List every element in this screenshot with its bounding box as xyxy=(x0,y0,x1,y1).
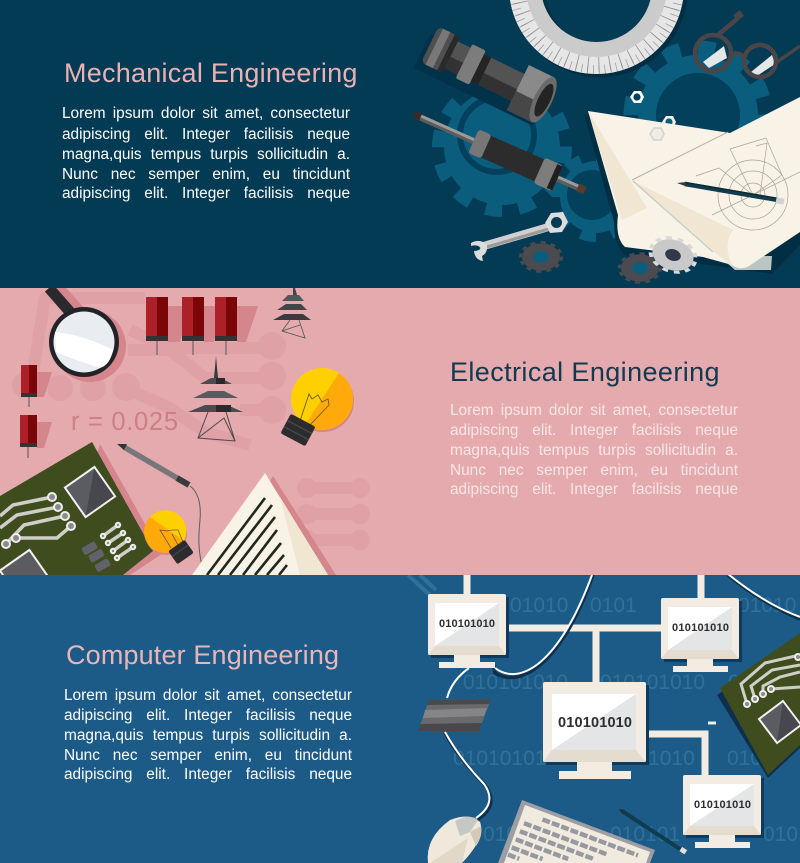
icon: monitor bottom right xyxy=(683,775,764,848)
monitor screen digits: 010101010 xyxy=(439,618,495,630)
icon: glasses xyxy=(695,13,800,77)
heading: Computer Engineering: Computer Engineering xyxy=(66,640,339,670)
icon: large gear left xyxy=(439,84,565,210)
icon: small gear middle xyxy=(556,157,636,237)
background binary digits: 0101 xyxy=(590,594,637,617)
circuit traces in background xyxy=(30,298,358,540)
monitor screen digits: 010101010 xyxy=(672,622,729,634)
icon: small transmission tower xyxy=(273,288,311,338)
icon: protractor xyxy=(514,0,680,70)
background binary digits: 01010 xyxy=(510,594,568,617)
icon: large light bulb xyxy=(280,368,354,446)
text block: computer description: adipiscing elit. Integer facilisis neque xyxy=(64,766,352,783)
decorative corner stripe xyxy=(408,575,436,597)
background binary digits: 010 xyxy=(763,823,798,846)
icon: large transmission tower xyxy=(188,356,243,441)
background binary digits: 010 xyxy=(483,823,518,846)
background binary digits xyxy=(453,594,798,846)
icon: center monitor xyxy=(543,682,649,779)
icon: magnifying glass xyxy=(49,288,126,382)
text block: electrical description: magna,quis tempus turpis sollicitudin a. xyxy=(450,442,738,459)
background binary digits: 010 xyxy=(728,671,763,694)
monitor screen digits: 010101010 xyxy=(694,799,751,811)
icon: circuit board right xyxy=(717,633,800,778)
background binary digits: 010101010 xyxy=(600,671,705,694)
icon: dark cylinder xyxy=(414,20,562,129)
icon: dark gear bottom xyxy=(620,253,660,283)
illustration: electrical components xyxy=(0,288,370,575)
panel: electrical engineering xyxy=(0,288,800,575)
icon: capacitors row xyxy=(146,297,258,355)
text block: mechanical description: magna,quis tempus turpis sollicitudin a. xyxy=(62,146,350,163)
icon: pencil xyxy=(619,809,687,854)
text block: mechanical description xyxy=(62,105,350,202)
icon: large gear right xyxy=(631,48,765,182)
icon: monitor top right xyxy=(661,598,742,672)
text block: computer description: Lorem ipsum dolor sit amet, consectetur xyxy=(64,687,352,704)
network wires xyxy=(467,575,716,776)
icon: monitor top left xyxy=(428,594,509,668)
background binary digits: 0101010 xyxy=(613,747,695,770)
icon: small dark gear under wrench xyxy=(520,242,562,272)
text block: mechanical description: adipiscing elit. Integer facilisis neque xyxy=(62,185,350,202)
monitor screen digits xyxy=(439,618,751,811)
label: r = 0.025: r = 0.025 xyxy=(71,408,178,436)
icon: silver gear xyxy=(646,232,700,278)
background binary digits: 01010 xyxy=(738,594,796,617)
circuit pads in background xyxy=(12,332,370,550)
illustration: mechanical tools xyxy=(412,0,800,284)
icon: folded paper triangle xyxy=(192,473,336,575)
cables xyxy=(445,574,800,820)
text block: electrical description: adipiscing elit. Integer facilisis neque xyxy=(450,422,738,439)
icon: loose nuts xyxy=(630,91,676,128)
background binary digits: 0101010101 xyxy=(453,747,570,770)
heading: Mechanical Engineering: Mechanical Engineering xyxy=(64,58,358,88)
icon: small light bulb xyxy=(144,510,194,564)
text block: electrical description: Nunc nec semper enim, eu tincidunt xyxy=(450,462,738,479)
text block: mechanical description: Nunc nec semper enim, eu tincidunt xyxy=(62,166,350,183)
icon: piston xyxy=(408,102,591,203)
background binary digits: 010 xyxy=(727,747,762,770)
text block: mechanical description: Lorem ipsum dolor sit amet, consectetur xyxy=(62,105,350,122)
panel: mechanical engineering xyxy=(0,0,800,288)
background binary digits: 010101 xyxy=(610,823,680,846)
icon: wrench xyxy=(471,212,568,261)
illustration: computer network xyxy=(407,575,800,863)
text block: mechanical description: adipiscing elit. Integer facilisis neque xyxy=(62,126,350,143)
background binary digits: 010101010 xyxy=(463,671,568,694)
icon: keyboard xyxy=(498,800,655,863)
text block: electrical description xyxy=(450,402,738,498)
text block: electrical description: adipiscing elit. Integer facilisis neque xyxy=(450,481,738,498)
monitor screen digits: 010101010 xyxy=(558,715,632,731)
icon: modem xyxy=(418,699,491,731)
text block: electrical description: Lorem ipsum dolor sit amet, consectetur xyxy=(450,402,738,419)
icon: small capacitors left xyxy=(20,365,52,458)
text block: computer description: adipiscing elit. Integer facilisis neque xyxy=(64,707,352,724)
icon: pencil xyxy=(677,182,784,205)
panel: computer engineering xyxy=(0,575,800,863)
icon: drawing paper sheets xyxy=(584,97,800,274)
text block: computer description: Nunc nec semper enim, eu tincidunt xyxy=(64,747,352,764)
icon: technical drawing on paper xyxy=(696,138,800,230)
text block: computer description xyxy=(64,687,352,783)
icon: circuit board xyxy=(0,442,162,601)
icon: mouse xyxy=(428,816,481,863)
icon: pen with cable xyxy=(117,444,206,576)
heading: Electrical Engineering: Electrical Engineering xyxy=(450,357,720,387)
text block: computer description: magna,quis tempus turpis sollicitudin a. xyxy=(64,727,352,744)
